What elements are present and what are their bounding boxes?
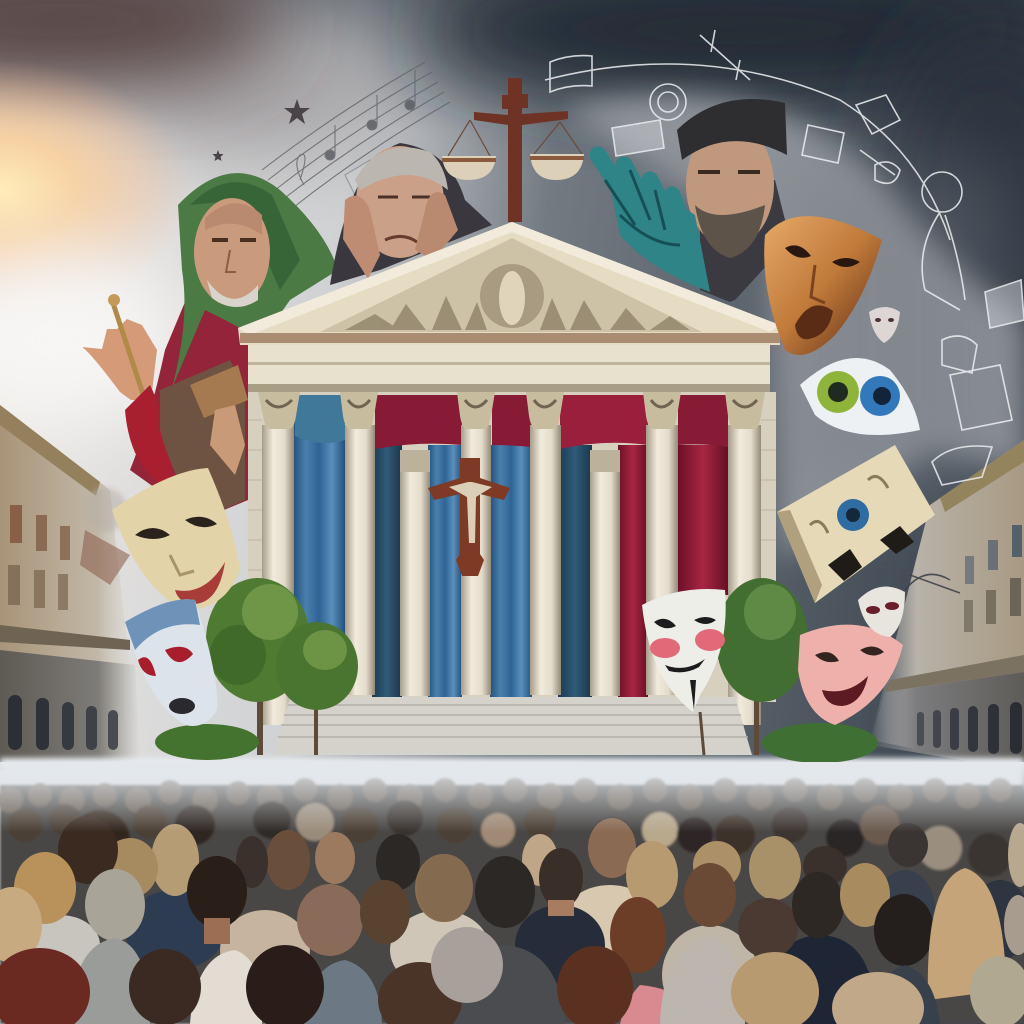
front columns <box>258 392 765 725</box>
mask: gold tragedy <box>764 216 882 355</box>
mask: blue and white left <box>125 599 217 726</box>
crowd front row heads <box>0 927 1024 1024</box>
entablature <box>248 342 770 392</box>
figure: bearded man in dark cap <box>677 99 790 302</box>
music sheet sketch <box>262 62 450 210</box>
mask: tiny white <box>869 307 900 343</box>
white sketches around the right side <box>545 30 1024 593</box>
stone steps <box>275 697 752 755</box>
mask: Guy Fawkes style <box>642 589 726 755</box>
crowd middle rows <box>0 816 1024 1024</box>
temple <box>238 222 780 725</box>
tree: right <box>716 578 808 755</box>
teal glove <box>598 155 710 292</box>
beige mechanical box <box>777 445 935 603</box>
crowd <box>0 762 1024 1024</box>
mask: pink laughing <box>798 625 903 725</box>
crowd back rows <box>0 778 1024 1024</box>
right palace building <box>870 440 1024 770</box>
crowd front row shoulders <box>70 935 940 1024</box>
mask: left comedy mask <box>112 468 240 610</box>
stone side walls <box>248 420 776 570</box>
pale ground <box>0 758 1024 790</box>
haze over back of crowd <box>0 762 1024 832</box>
figure: old man in green hood <box>80 173 338 585</box>
figure: old woman resting on hands <box>330 143 492 285</box>
eye shape <box>800 358 920 435</box>
pediment <box>238 222 780 345</box>
bush: right <box>762 723 878 763</box>
tree: left small <box>276 622 358 755</box>
crucifix <box>428 458 510 576</box>
mask: small white on pink mask <box>858 587 905 637</box>
bush: left <box>155 724 259 760</box>
rear columns <box>400 450 620 696</box>
tree: left large <box>206 578 310 755</box>
left palace building <box>0 405 140 770</box>
cross with scales <box>442 78 584 222</box>
blue and red curtains <box>293 395 728 697</box>
rear wall <box>248 392 776 702</box>
star icons <box>212 99 310 161</box>
speckled grey cloud on the right <box>560 95 1024 560</box>
